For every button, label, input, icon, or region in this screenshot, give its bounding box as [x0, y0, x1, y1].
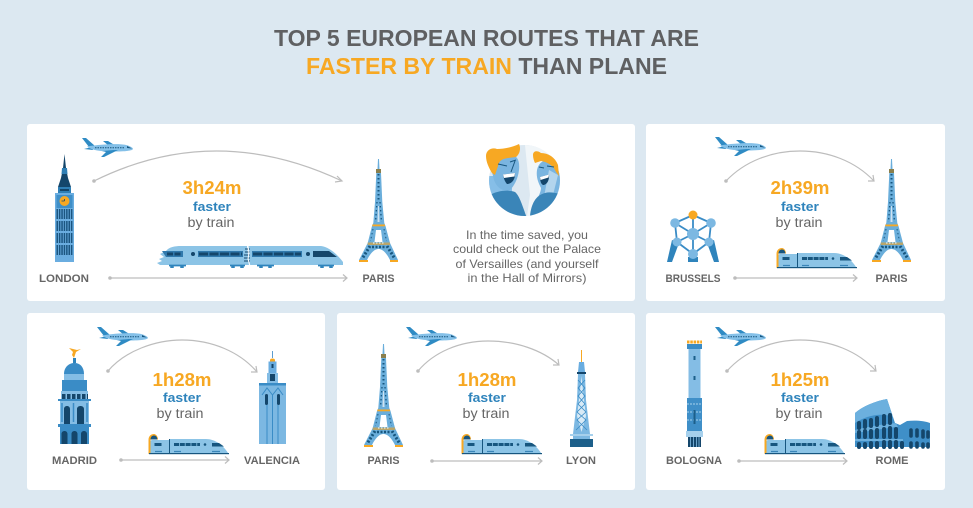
label: Paris: PARIS: [368, 455, 400, 467]
time saved Paris Lyon: 1h28m: [458, 370, 516, 390]
icon: train: [764, 434, 845, 454]
text: Versailles note: in the Hall of Mirrors): [468, 271, 587, 285]
title: FASTER BY TRAIN THAN PLANE: [306, 53, 667, 79]
icon: plane: [406, 327, 457, 346]
icon: plane: [715, 327, 766, 346]
flight arc arrow: [106, 340, 257, 373]
route line Paris Lyon: [430, 458, 542, 464]
label: Brussels: BRUSSELS: [666, 273, 720, 285]
flight arc arrow: [725, 340, 876, 373]
time saved Brussels Paris: [770, 178, 830, 230]
icon: train: [148, 434, 229, 454]
icon: Eiffel Tower: [364, 344, 403, 447]
icon: Colosseum: [855, 399, 930, 447]
icon: man laughing in mirror: [486, 144, 560, 216]
time saved London Paris: [182, 178, 242, 230]
icon: Big Ben: [55, 154, 74, 262]
title: TOP 5 EUROPEAN ROUTES THAT ARE: [274, 25, 699, 51]
flight arc arrow: [416, 341, 559, 373]
time saved Madrid Valencia: 1h28m: [152, 370, 212, 390]
time saved Brussels Paris: 2h39m: [770, 178, 830, 198]
route line London Paris: [108, 274, 347, 282]
time saved London Paris: faster: [193, 199, 231, 214]
time saved Bologna Rome: faster: [781, 390, 819, 405]
label: Valencia: VALENCIA: [244, 455, 300, 467]
time saved Paris Lyon: faster: [468, 390, 506, 405]
time saved Madrid Valencia: faster: [163, 390, 201, 405]
label: Paris: PARIS: [876, 273, 908, 285]
label: London: LONDON: [39, 273, 89, 285]
label: Rome: ROME: [876, 455, 908, 467]
time saved Bologna Rome: 1h25m: [770, 370, 830, 390]
panel: Brussels to Paris: [646, 124, 945, 301]
time saved Brussels Paris: faster: [781, 199, 819, 214]
icon: train: [776, 248, 857, 268]
time saved Brussels Paris: by train: [776, 215, 822, 230]
icon: train: [462, 434, 542, 454]
time saved Paris Lyon: [458, 370, 516, 421]
route line Brussels Paris: [733, 274, 857, 282]
panel: Paris to Lyon: [337, 313, 635, 490]
icon: Valencia tower: [259, 351, 286, 444]
flight arc arrow: [92, 151, 342, 183]
icon: Eiffel Tower: [872, 159, 911, 262]
icon: Atomium: [667, 210, 719, 262]
title: [274, 25, 699, 79]
icon: plane: [97, 327, 148, 346]
label: Paris: PARIS: [362, 273, 394, 285]
icon: Lyon Fourviere tower: [570, 350, 593, 447]
label: Madrid: MADRID: [52, 455, 97, 467]
icon: plane: [715, 137, 766, 156]
label: Bologna: BOLOGNA: [666, 455, 722, 467]
icon: plane: [82, 138, 133, 157]
panel: Bologna to Rome: [646, 313, 945, 490]
icon: long train: [157, 246, 343, 268]
panel: London to Paris: [27, 124, 635, 301]
text: Versailles note: [453, 228, 601, 285]
text: Versailles note: In the time saved, you: [466, 228, 588, 242]
text: Versailles note: could check out the Palace: [453, 242, 601, 256]
time saved Bologna Rome: [770, 370, 830, 421]
flight arc arrow: [724, 151, 874, 183]
icon: Madrid Metropolis building: [58, 348, 91, 444]
icon: Asinelli tower: [686, 342, 703, 447]
route line Madrid Valencia: [119, 456, 229, 464]
time saved London Paris: 3h24m: [182, 178, 242, 198]
time saved London Paris: by train: [188, 215, 234, 230]
panel: Madrid to Valencia: [27, 313, 325, 490]
label: Lyon: LYON: [566, 455, 596, 467]
time saved Bologna Rome: by train: [776, 406, 822, 421]
time saved Paris Lyon: by train: [462, 406, 510, 421]
route line Bologna Rome: [737, 458, 847, 464]
text: Versailles note: of Versailles (and yourself: [456, 257, 599, 271]
time saved Madrid Valencia: [152, 370, 212, 421]
icon: Eiffel Tower: [359, 159, 398, 262]
time saved Madrid Valencia: by train: [156, 406, 204, 421]
